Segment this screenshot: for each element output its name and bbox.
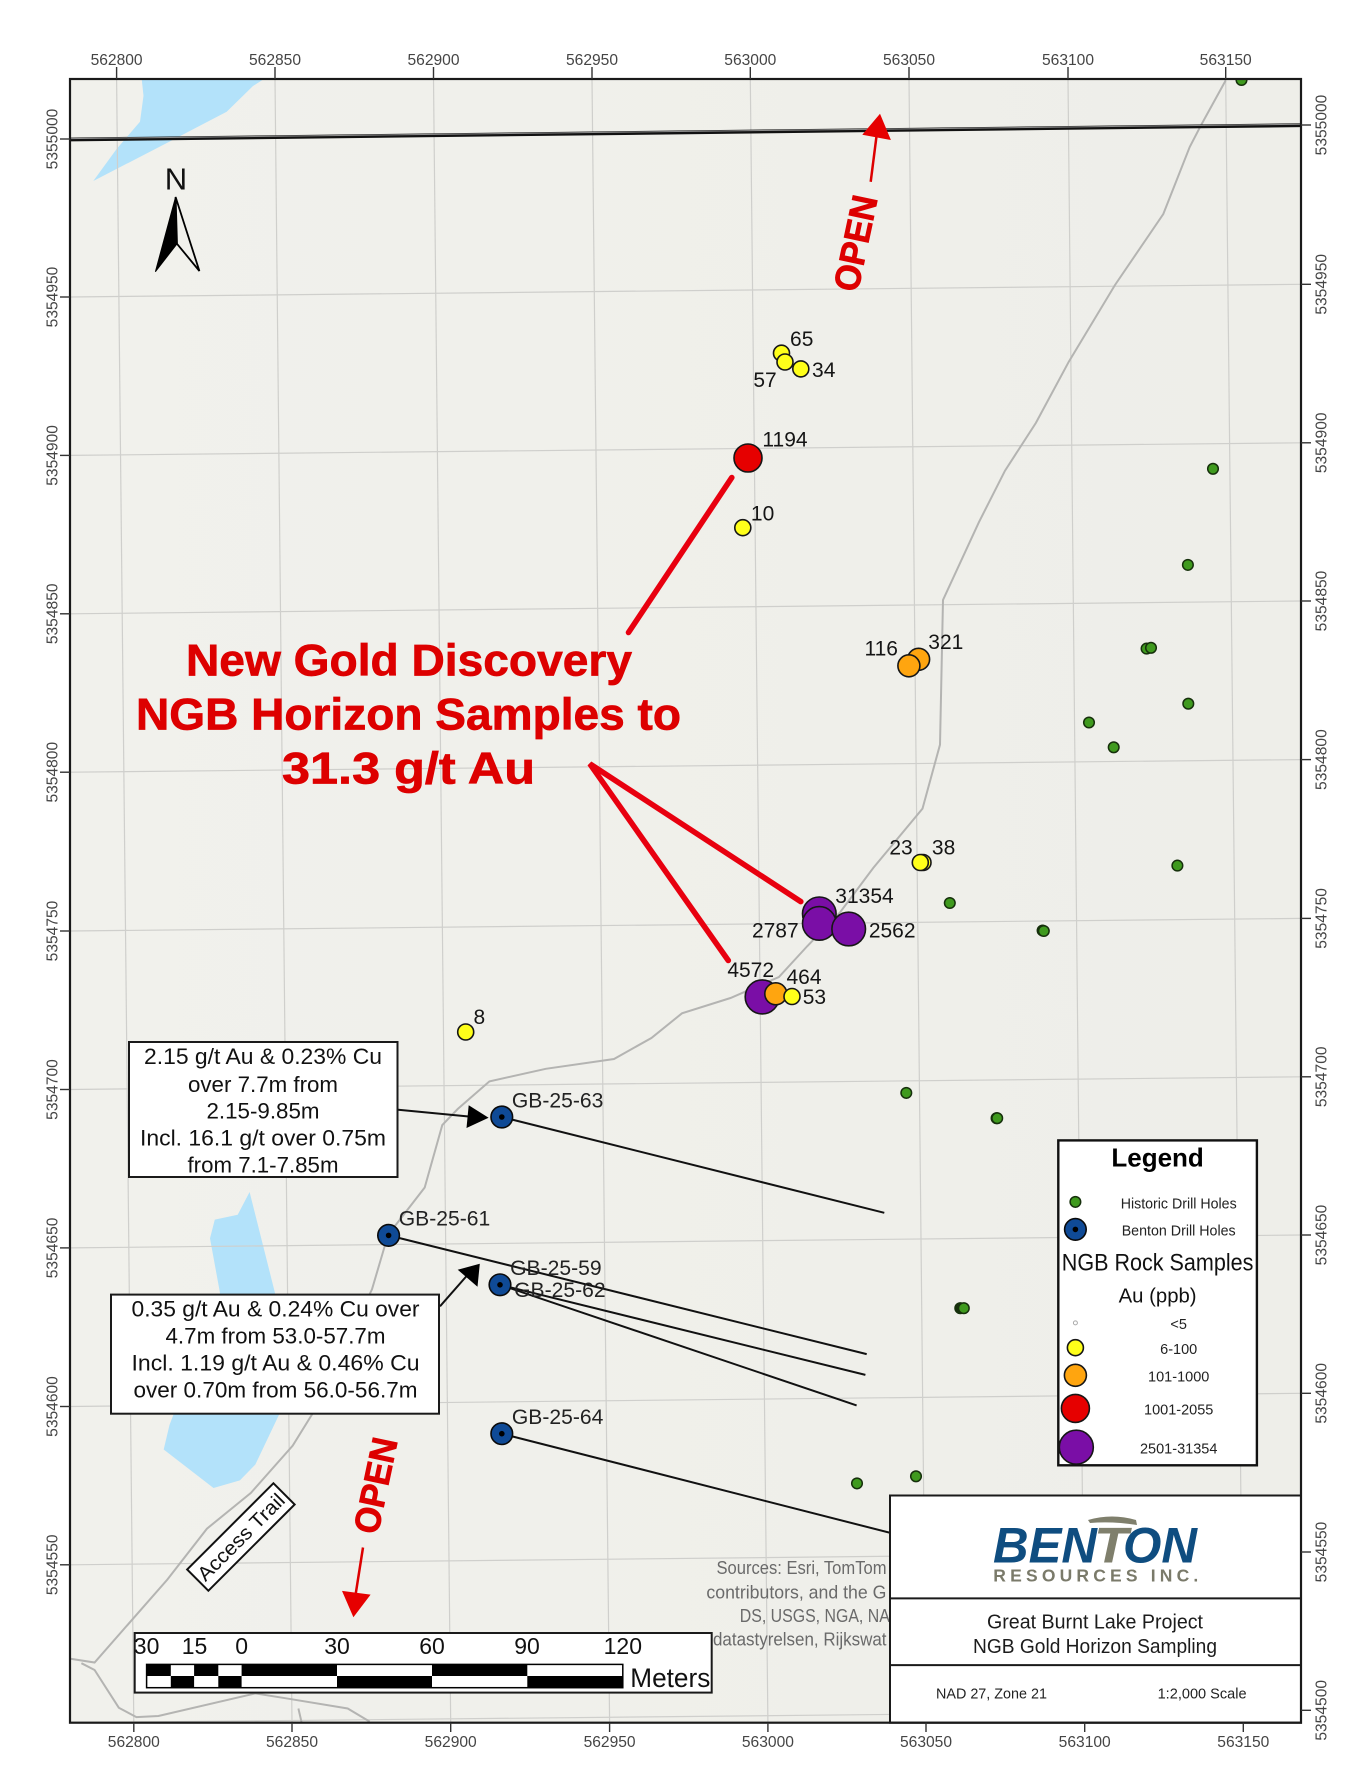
- top axis labels: 562850: [249, 52, 301, 69]
- Benton drill holes: [378, 1106, 513, 1444]
- scale bar: 90: [514, 1633, 540, 1659]
- datum and scale: 1:2,000 Scale: [1158, 1686, 1247, 1702]
- drill hole labels: GB-25-59: [510, 1257, 602, 1280]
- project title: NGB Gold Horizon Sampling: [973, 1636, 1217, 1658]
- sample value labels: 8: [473, 1006, 485, 1029]
- label: access trail: Access Trail: [194, 1490, 290, 1586]
- project title: [973, 1612, 1217, 1658]
- right axis labels: 5354900: [1314, 412, 1330, 473]
- right axis labels: 5354700: [1314, 1046, 1330, 1107]
- left axis labels: 5354750: [44, 900, 62, 961]
- bottom axis labels: 562850: [266, 1734, 318, 1751]
- right axis labels: 5354600: [1314, 1363, 1330, 1424]
- bottom axis labels: 563000: [742, 1734, 794, 1751]
- sample value labels: 38: [932, 836, 955, 860]
- right axis labels: [1314, 94, 1330, 1741]
- panel: legend: Legend: [1111, 1142, 1204, 1172]
- OPEN label north with arrow: [825, 114, 891, 295]
- sample value labels: [473, 328, 963, 1029]
- headline: new gold discovery: [136, 636, 681, 794]
- sample value labels: 321: [928, 631, 963, 654]
- bottom axis labels: 563150: [1217, 1734, 1270, 1751]
- right axis labels: 5354550: [1314, 1521, 1330, 1582]
- top axis labels: 563150: [1200, 52, 1252, 69]
- bottom axis labels: 563100: [1059, 1734, 1111, 1751]
- callout: GB-25-59 and 62 intercept: [111, 1295, 439, 1414]
- arrow: callout to GB-25-63: [398, 1105, 489, 1128]
- right axis labels: 5354800: [1314, 729, 1330, 790]
- sample value labels: 31354: [835, 885, 894, 908]
- legend item: 101-1000: 101-1000: [1148, 1369, 1209, 1385]
- bottom axis labels: [108, 1734, 1270, 1751]
- drill hole labels: GB-25-61: [399, 1208, 490, 1231]
- callout: GB-25-59 and 62 intercept: 0.35 g/t Au & 0.24% Cu over: [132, 1296, 420, 1321]
- headline: new gold discovery: New Gold Discovery: [186, 636, 632, 685]
- sample value labels: 10: [751, 502, 774, 526]
- basemap attribution: datastyrelsen, Rijkswat: [713, 1630, 886, 1650]
- drill hole labels: GB-25-62: [514, 1279, 606, 1302]
- callout pointer lines: [590, 478, 801, 960]
- sample value labels: 34: [812, 359, 836, 382]
- top axis labels: 562800: [91, 52, 143, 69]
- legend item: 1001-2055: [1061, 1394, 1213, 1422]
- callout: GB-25-63 intercept: 2.15-9.85m: [206, 1099, 320, 1124]
- datum and scale: [936, 1686, 1247, 1702]
- left axis labels: 5354950: [44, 266, 62, 327]
- callout: GB-25-63 intercept: over 7.7m from: [188, 1072, 338, 1097]
- sample value labels: 116: [864, 638, 898, 660]
- legend item: under 5: <5: [1170, 1317, 1187, 1333]
- top axis labels: 563050: [883, 52, 935, 69]
- right axis labels: 5354500: [1314, 1680, 1330, 1741]
- scale bar: [134, 1633, 712, 1693]
- sample value labels: 65: [790, 328, 813, 351]
- legend item: benton drill holes: [1065, 1219, 1236, 1240]
- icon: north arrow: N: [165, 162, 187, 196]
- left axis labels: 5354700: [44, 1059, 62, 1120]
- bottom axis labels: 562800: [108, 1734, 160, 1751]
- icon: north arrow: [155, 162, 199, 272]
- scale bar: 0: [235, 1633, 248, 1659]
- drill hole labels: GB-25-63: [512, 1090, 603, 1112]
- top axis labels: 563100: [1042, 52, 1094, 69]
- datum and scale: NAD 27, Zone 21: [936, 1686, 1047, 1702]
- sample value labels: 23: [889, 836, 913, 860]
- water: northern pond: [93, 79, 264, 181]
- top axis labels: 562900: [407, 52, 460, 69]
- bottom axis labels: 562950: [584, 1734, 636, 1751]
- basemap attribution: Sources: Esri, TomTom: [716, 1558, 886, 1578]
- basemap attribution: DS, USGS, NGA, NA: [740, 1606, 890, 1626]
- legend item: 101-1000: [1064, 1364, 1209, 1386]
- sample value labels: 53: [803, 986, 826, 1009]
- basemap attribution: [706, 1558, 890, 1650]
- OPEN label south with arrow: OPEN: [345, 1434, 406, 1537]
- panel: legend: [1058, 1140, 1257, 1465]
- scale bar: 60: [419, 1633, 445, 1659]
- legend heading: Au ppb: Au (ppb): [1119, 1286, 1197, 1308]
- legend item: under 5: [1073, 1317, 1187, 1333]
- logo: Benton Resources: BEN: [993, 1517, 1098, 1573]
- right axis labels: 5355000: [1314, 94, 1330, 155]
- sample value labels: 2787: [752, 920, 799, 942]
- legend item: 2501-31354: 2501-31354: [1140, 1442, 1217, 1458]
- scale bar: Meters: [630, 1663, 710, 1693]
- logo: Benton Resources: RESOURCES INC.: [993, 1565, 1198, 1585]
- legend item: 2501-31354: [1059, 1430, 1217, 1464]
- headline: new gold discovery: 31.3 g/t Au: [282, 745, 535, 794]
- historic drill holes: [852, 75, 1247, 1489]
- scale bar: 120: [604, 1633, 642, 1659]
- arrow: callout to GB-25-59: [440, 1264, 480, 1306]
- drill hole labels: [399, 1090, 606, 1429]
- legend item: historic drill holes: Historic Drill Holes: [1121, 1196, 1237, 1212]
- drill traces: [389, 1117, 890, 1533]
- legend item: 1001-2055: 1001-2055: [1144, 1402, 1213, 1418]
- sample value labels: 2562: [869, 920, 916, 942]
- OPEN label south with arrow: [342, 1434, 406, 1617]
- left axis labels: 5354800: [44, 742, 62, 803]
- callout: GB-25-63 intercept: Incl. 16.1 g/t over 0.75m: [140, 1125, 386, 1150]
- scale bar: 15: [182, 1633, 207, 1659]
- callout: GB-25-63 intercept: from 7.1-7.85m: [188, 1152, 338, 1178]
- right axis labels: 5354950: [1314, 254, 1330, 315]
- top axis labels: 563000: [724, 52, 777, 69]
- legend item: historic drill holes: [1070, 1196, 1237, 1212]
- right axis labels: 5354850: [1314, 570, 1330, 631]
- top axis labels: [91, 52, 1252, 69]
- left axis labels: 5355000: [44, 108, 62, 169]
- callout: GB-25-59 and 62 intercept: 4.7m from 53.0-57.7m: [166, 1324, 386, 1349]
- callout: GB-25-59 and 62 intercept: over 0.70m from 56.0-56.7m: [134, 1378, 418, 1402]
- sample value labels: 1194: [762, 428, 808, 452]
- callout: GB-25-63 intercept: 2.15 g/t Au & 0.23% Cu: [144, 1044, 382, 1069]
- scale bar: 30: [324, 1633, 350, 1659]
- right axis labels: 5354750: [1314, 888, 1330, 949]
- left axis labels: 5354900: [44, 425, 62, 486]
- OPEN label north with arrow: OPEN: [825, 191, 886, 295]
- headline: new gold discovery: NGB Horizon Samples to: [136, 690, 681, 739]
- sample value labels: 57: [753, 369, 777, 392]
- bottom axis labels: 562900: [425, 1734, 477, 1751]
- rock samples: [458, 345, 931, 1040]
- left axis labels: 5354550: [44, 1534, 62, 1595]
- left axis labels: 5354650: [44, 1217, 62, 1278]
- legend heading: NGB rock samples: NGB Rock Samples: [1062, 1250, 1253, 1276]
- water: southern pond: [164, 1192, 280, 1488]
- project title: Great Burnt Lake Project: [987, 1612, 1203, 1634]
- sample value labels: 464: [786, 966, 822, 989]
- callout: GB-25-59 and 62 intercept: Incl. 1.19 g/t Au & 0.46% Cu: [132, 1350, 420, 1375]
- logo: Benton Resources: [993, 1516, 1198, 1585]
- top axis labels: 562950: [566, 52, 618, 69]
- right axis labels: 5354650: [1314, 1204, 1330, 1265]
- logo: Benton Resources: T: [1094, 1517, 1133, 1573]
- left axis labels: [44, 108, 62, 1595]
- basemap attribution: contributors, and the G: [706, 1582, 886, 1602]
- logo: Benton Resources: ON: [1123, 1517, 1198, 1573]
- left axis labels: 5354850: [44, 583, 62, 644]
- legend item: 6-100: [1067, 1340, 1197, 1358]
- bottom axis labels: 563050: [900, 1734, 952, 1751]
- sample value labels: 4572: [727, 959, 774, 982]
- power line / road across north: [70, 124, 1301, 140]
- legend item: benton drill holes: Benton Drill Holes: [1122, 1223, 1236, 1239]
- panel: title block: [890, 1496, 1301, 1723]
- drill hole labels: GB-25-64: [512, 1406, 604, 1429]
- callout: GB-25-63 intercept: [129, 1042, 398, 1178]
- scale bar: 30: [134, 1633, 159, 1659]
- left axis labels: 5354600: [44, 1376, 62, 1437]
- access trail route: [70, 80, 1226, 1722]
- legend item: 6-100: 6-100: [1160, 1342, 1197, 1358]
